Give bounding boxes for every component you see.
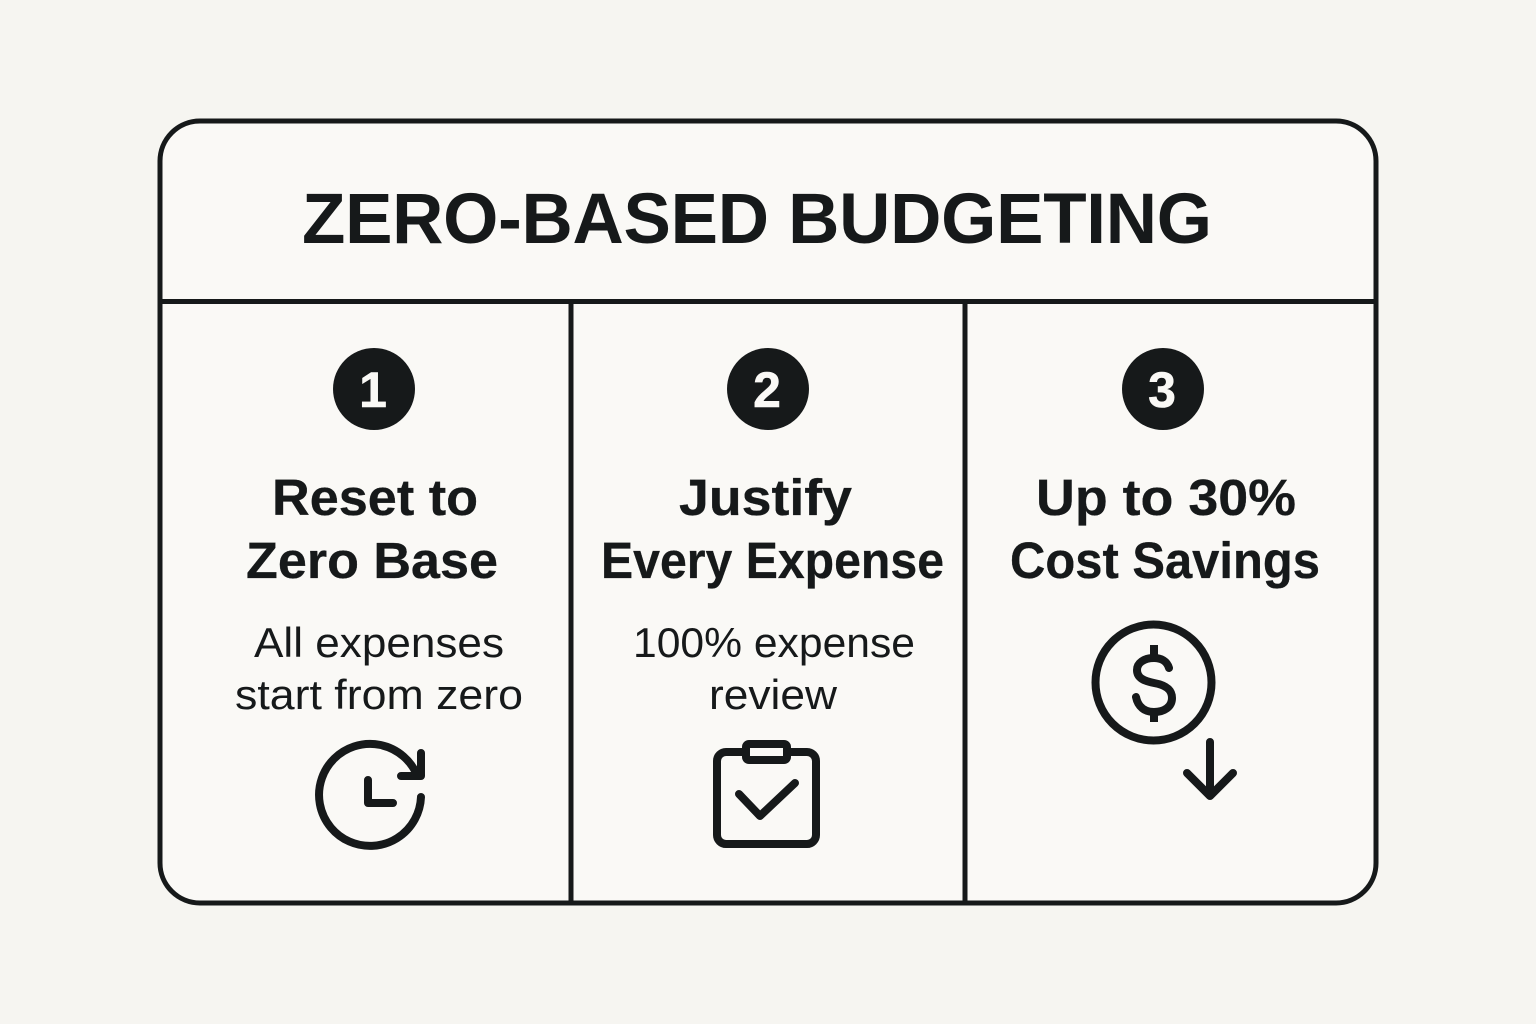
panel: step 2 <box>601 348 944 844</box>
heading: reset to zero base: Zero Base <box>246 532 498 589</box>
description: all expenses start from zero <box>235 619 523 718</box>
description: 100% expense review: review <box>709 671 838 718</box>
heading: up to 30% cost savings: Up to 30% <box>1036 469 1296 526</box>
arrow: down <box>1187 742 1233 796</box>
number badge 1 <box>333 348 415 430</box>
heading: justify every expense: Justify <box>679 469 853 526</box>
number badge 3: 3 <box>1148 362 1176 418</box>
description: 100% expense review <box>633 619 915 718</box>
number badge 2: 2 <box>753 362 781 418</box>
heading: justify every expense: Every Expense <box>601 532 944 589</box>
number badge 1: 1 <box>359 362 387 418</box>
panel: step 3 <box>1010 348 1320 796</box>
number badge 3 <box>1122 348 1204 430</box>
icon: dollar coin <box>1096 624 1212 740</box>
description: all expenses start from zero: start from zero <box>235 671 523 718</box>
heading: up to 30% cost savings: Cost Savings <box>1010 532 1320 589</box>
icon: clock with reset arrow <box>319 744 421 846</box>
description: all expenses start from zero: All expenses <box>254 619 504 666</box>
card frame <box>160 121 1376 903</box>
description: 100% expense review: 100% expense <box>633 619 915 666</box>
heading: up to 30% cost savings <box>1010 469 1320 589</box>
number badge 2 <box>727 348 809 430</box>
icon: clipboard with check mark <box>717 744 816 844</box>
heading: justify every expense <box>601 469 944 589</box>
title: ZERO-BASED BUDGETING <box>302 180 1212 259</box>
heading: reset to zero base <box>246 469 498 589</box>
heading: reset to zero base: Reset to <box>272 469 478 526</box>
panel: step 1 <box>235 348 523 846</box>
